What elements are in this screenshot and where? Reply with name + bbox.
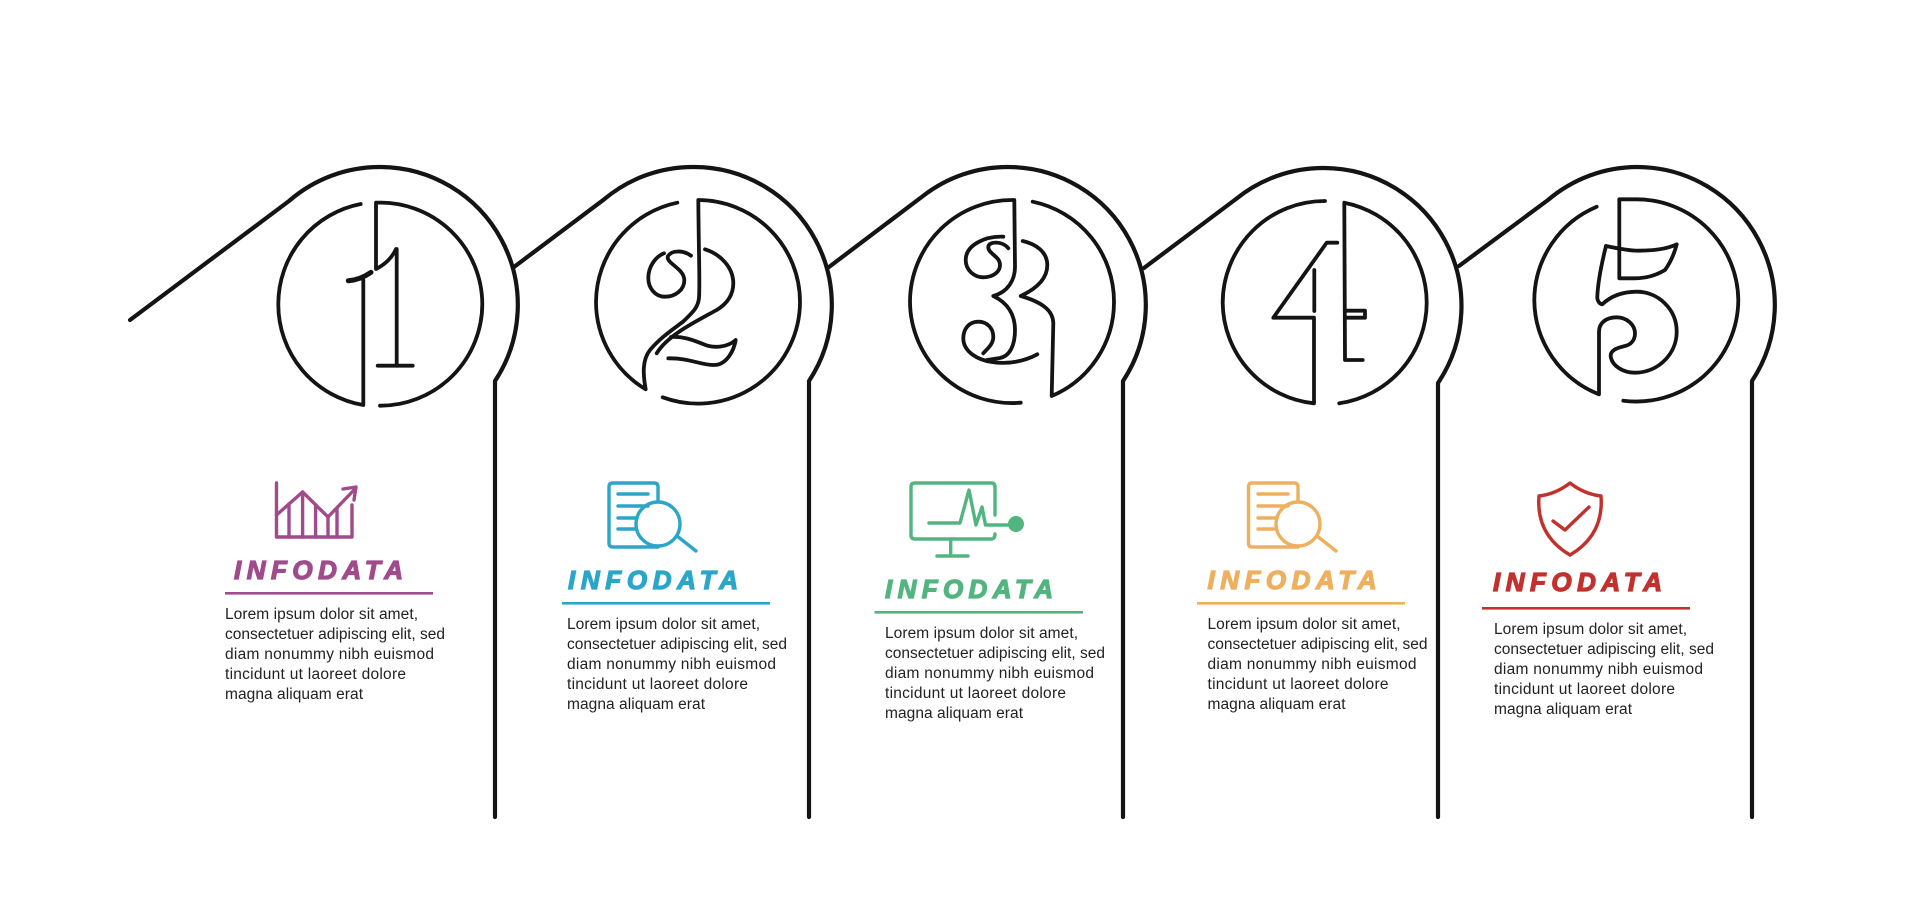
- outer outline: step 2: [514, 167, 832, 817]
- body text: step 2: consectetuer adipiscing elit, sed: [567, 636, 787, 653]
- heading: step 2: INFODATA: [568, 565, 738, 595]
- number badge 1: [278, 203, 482, 406]
- body text: step 3: diam nonummy nibh euismod: [885, 665, 1094, 682]
- body text: step 2: Lorem ipsum dolor sit amet,: [567, 616, 760, 633]
- body text: step 1: Lorem ipsum dolor sit amet,: [225, 606, 418, 623]
- body text: step 5: tincidunt ut laoreet dolore: [1494, 681, 1675, 698]
- body text: step 4: [1208, 616, 1428, 713]
- body text: step 2: diam nonummy nibh euismod: [567, 656, 776, 673]
- heading: step 3: INFODATA: [885, 574, 1053, 604]
- number badge 4: [1223, 201, 1427, 403]
- body text: step 1: tincidunt ut laoreet dolore: [225, 666, 406, 683]
- heading rule: step 5: [1482, 607, 1690, 610]
- body text: step 5: consectetuer adipiscing elit, sed: [1494, 641, 1714, 658]
- step 5 panel: [1459, 167, 1775, 817]
- heading rule: step 1: [225, 592, 433, 595]
- body text: step 4: diam nonummy nibh euismod: [1208, 656, 1416, 673]
- body text: step 2: tincidunt ut laoreet dolore: [567, 676, 748, 693]
- body text: step 3: tincidunt ut laoreet dolore: [885, 685, 1066, 702]
- body text: step 4: consectetuer adipiscing elit, sed: [1208, 636, 1428, 653]
- number badge 3: [910, 200, 1114, 403]
- step 4 panel: [1144, 168, 1461, 817]
- body text: step 3: Lorem ipsum dolor sit amet,: [885, 625, 1078, 642]
- body text: step 4: magna aliquam erat: [1208, 696, 1346, 713]
- heading: step 1: INFODATA: [234, 555, 403, 585]
- number badge 5: [1534, 199, 1738, 402]
- body text: step 5: Lorem ipsum dolor sit amet,: [1494, 621, 1687, 638]
- outer outline: step 4: [1144, 168, 1461, 817]
- body text: step 2: [567, 616, 787, 713]
- body text: step 2: magna aliquam erat: [567, 696, 706, 713]
- body text: step 1: [225, 606, 445, 703]
- icon: monitor with pulse: [911, 483, 1024, 556]
- outer outline: step 5: [1459, 167, 1775, 817]
- heading rule: step 4: [1197, 602, 1405, 605]
- icon: document search: [1248, 483, 1336, 551]
- body text: step 5: diam nonummy nibh euismod: [1494, 661, 1703, 678]
- step 3 panel: [829, 167, 1146, 817]
- body text: step 3: magna aliquam erat: [885, 705, 1024, 722]
- step 1 panel: [130, 167, 518, 817]
- icon: document search: [609, 483, 696, 551]
- heading rule: step 2: [562, 602, 770, 605]
- heading: step 5: INFODATA: [1493, 567, 1662, 597]
- body text: step 3: [885, 625, 1105, 722]
- heading: step 4: INFODATA: [1208, 565, 1376, 595]
- body text: step 1: consectetuer adipiscing elit, sed: [225, 626, 445, 643]
- body text: step 4: tincidunt ut laoreet dolore: [1208, 676, 1388, 693]
- body text: step 5: [1494, 621, 1714, 718]
- step 2 panel: [514, 167, 832, 817]
- outer outline: step 3: [829, 167, 1146, 817]
- number badge 2: [596, 200, 800, 404]
- heading rule: step 3: [874, 611, 1083, 614]
- body text: step 1: diam nonummy nibh euismod: [225, 646, 434, 663]
- icon: shield check: [1539, 483, 1601, 555]
- body text: step 4: Lorem ipsum dolor sit amet,: [1208, 616, 1400, 633]
- icon: growth chart: [276, 483, 356, 537]
- body text: step 1: magna aliquam erat: [225, 686, 364, 703]
- body text: step 3: consectetuer adipiscing elit, sed: [885, 645, 1105, 662]
- body text: step 5: magna aliquam erat: [1494, 701, 1633, 718]
- outer outline: step 1: [130, 167, 518, 817]
